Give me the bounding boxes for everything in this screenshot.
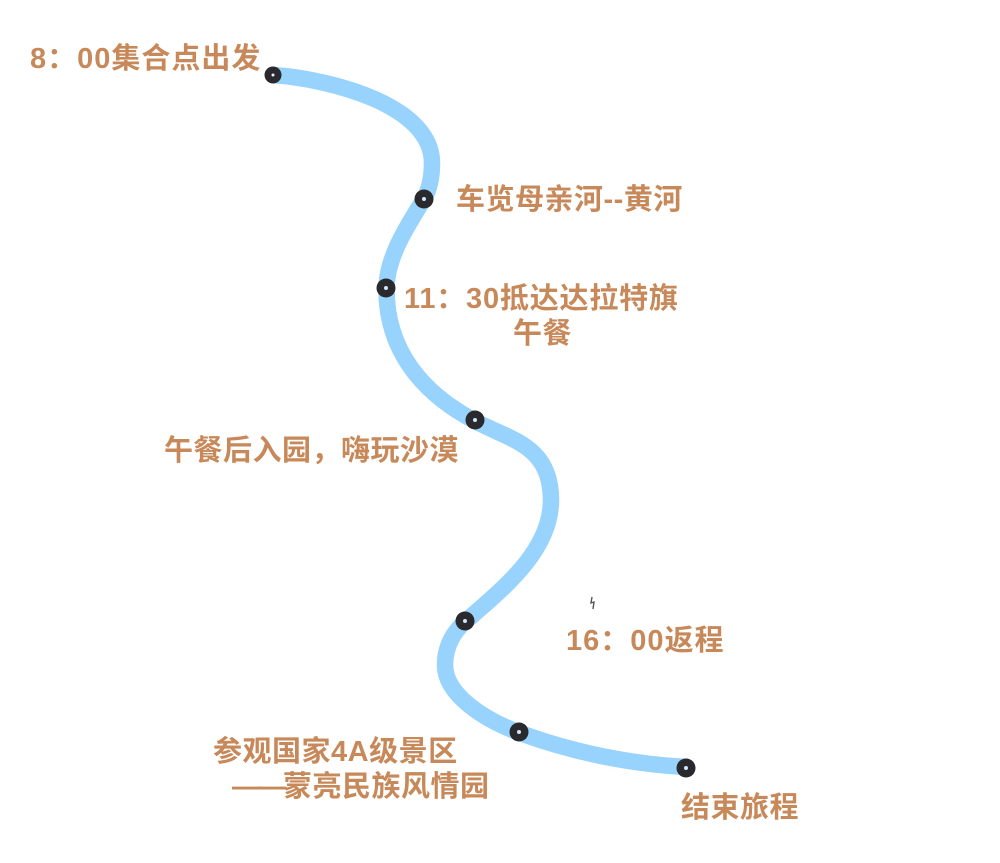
label: lunch: 午餐 xyxy=(513,318,572,350)
label: Yellow River: 车览母亲河--黄河 xyxy=(456,184,683,216)
label: desert: 午餐后入园，嗨玩沙漠 xyxy=(164,435,459,467)
route stops xyxy=(264,66,696,778)
label: scenic area: 参观国家4A级景区 xyxy=(213,736,458,768)
label: departure: 8：00集合点出发 xyxy=(30,43,261,75)
label: end: 结束旅程 xyxy=(681,792,799,824)
stray mark xyxy=(591,597,594,609)
label: arrival: 11：30抵达达拉特旗 xyxy=(404,283,679,315)
route line xyxy=(273,75,687,767)
label: folk park: ——蒙亮民族风情园 xyxy=(232,771,490,803)
label: return: 16：00返程 xyxy=(566,625,725,657)
